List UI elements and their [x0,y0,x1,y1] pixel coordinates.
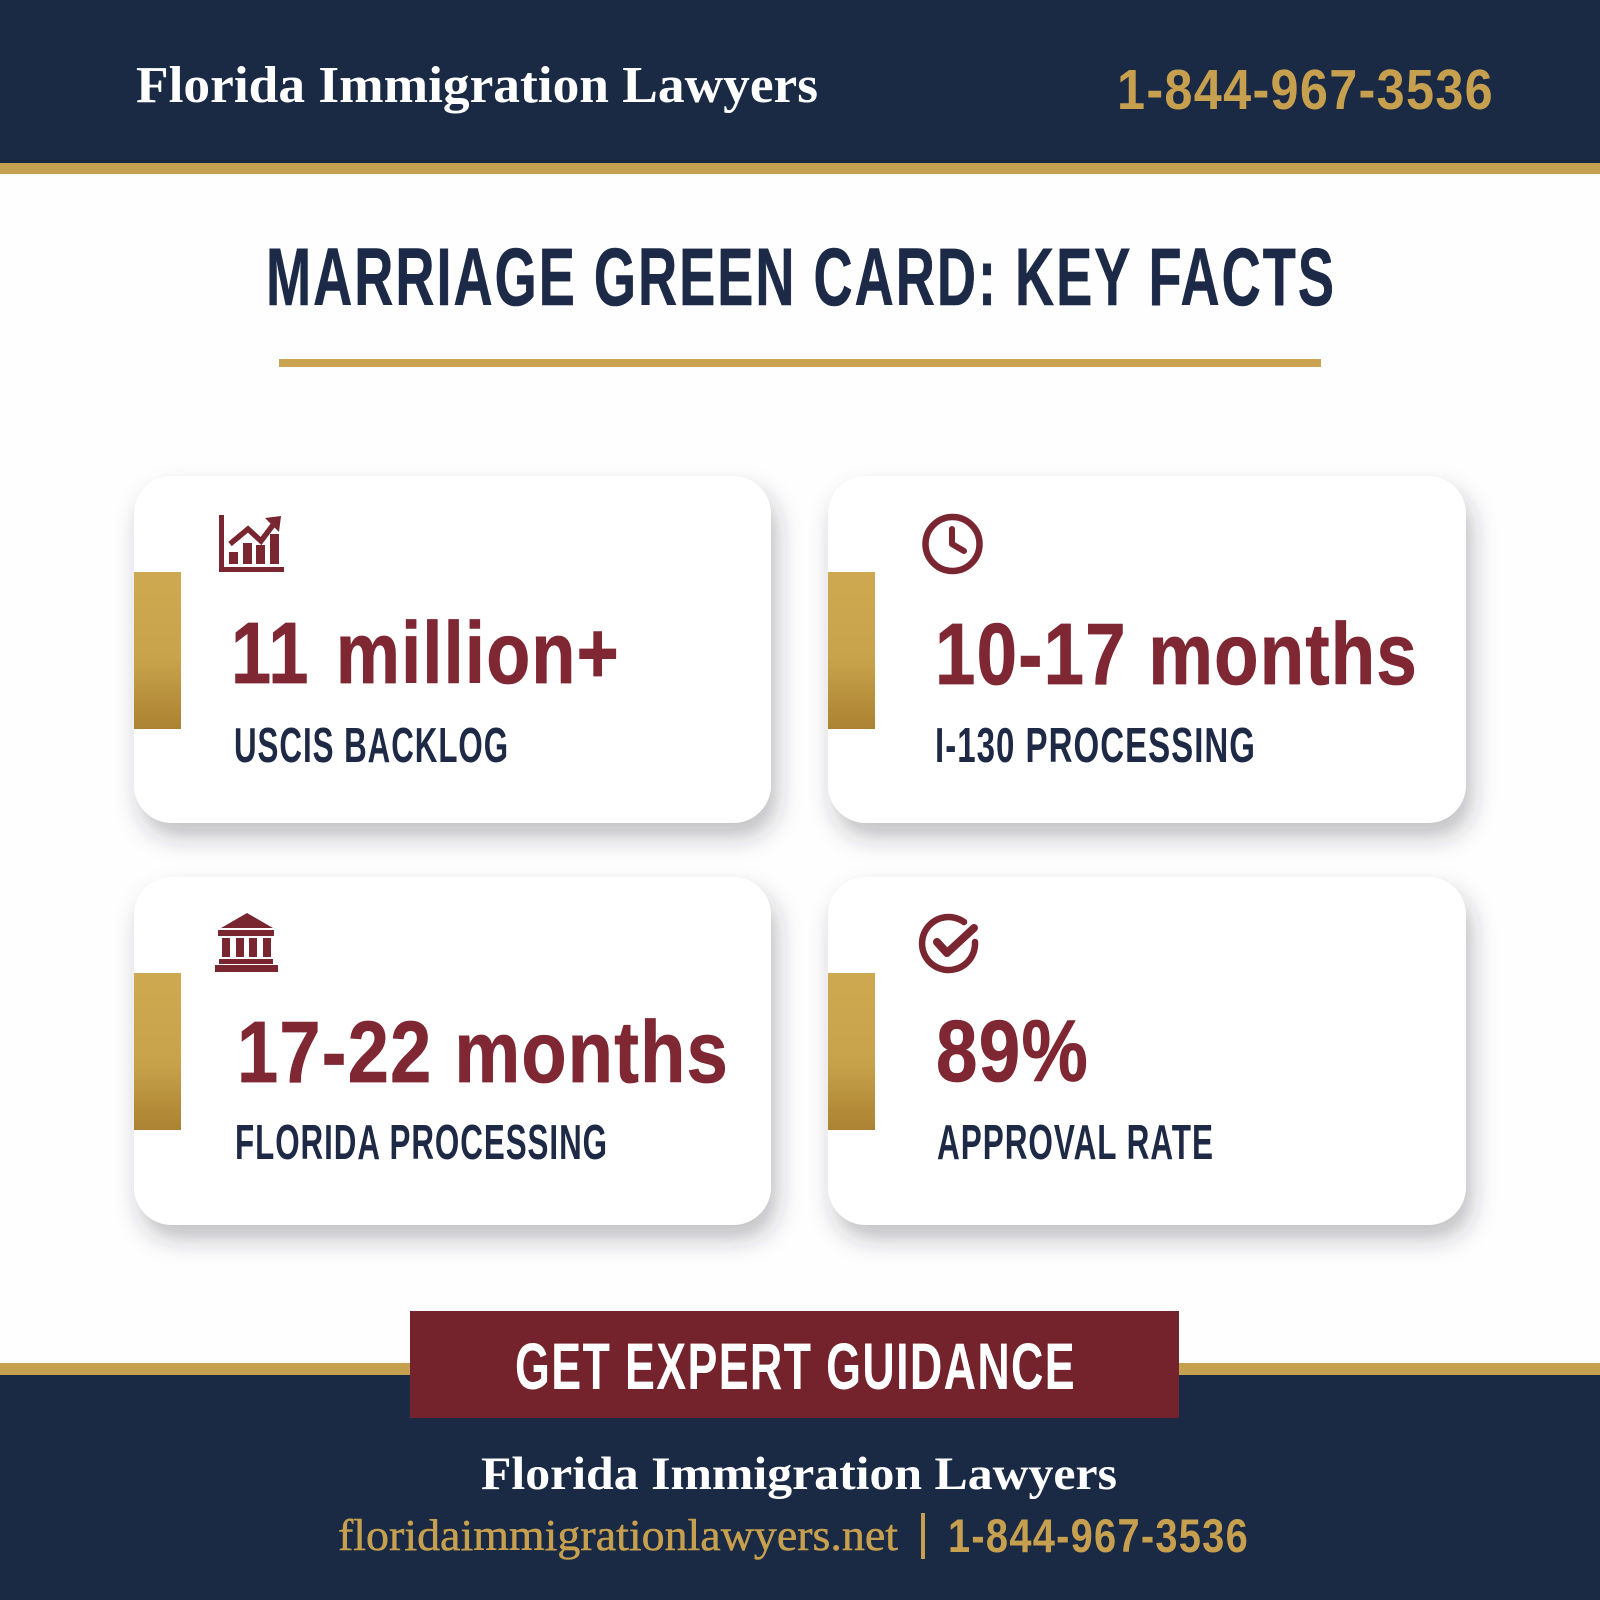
icon: chart [219,515,284,572]
header band [0,0,1600,174]
icon: courthouse [215,913,278,972]
title underline [279,359,1321,367]
footer website: floridaimmigrationlawyers.net [338,1511,898,1560]
header phone number: 1-844-967-3536 [1117,58,1494,122]
stat label: USCIS BACKLOG [234,719,509,773]
call to action text: GET EXPERT GUIDANCE [515,1329,1076,1403]
panel: I-130 processing [828,476,1466,823]
stat value: 10-17 months [935,606,1418,703]
stat label: APPROVAL RATE [937,1116,1214,1170]
icon: clock [926,517,980,571]
stat label: FLORIDA PROCESSING [235,1116,608,1170]
stat value: 89% [936,1003,1089,1100]
footer separator [921,1513,925,1559]
stat value: 11 million+ [231,605,620,702]
brand name: Florida Immigration Lawyers [136,57,818,114]
panel: USCIS backlog [134,476,771,823]
call to action banner [410,1311,1179,1418]
footer band [0,1363,1600,1600]
panel: Florida processing [134,877,771,1225]
stat value: 17-22 months [237,1004,729,1101]
icon: check in circle [922,917,975,970]
panel: approval rate [828,877,1466,1225]
footer phone: 1-844-967-3536 [948,1509,1249,1562]
stat label: I-130 PROCESSING [935,719,1256,773]
footer firm name: Florida Immigration Lawyers [481,1448,1117,1500]
